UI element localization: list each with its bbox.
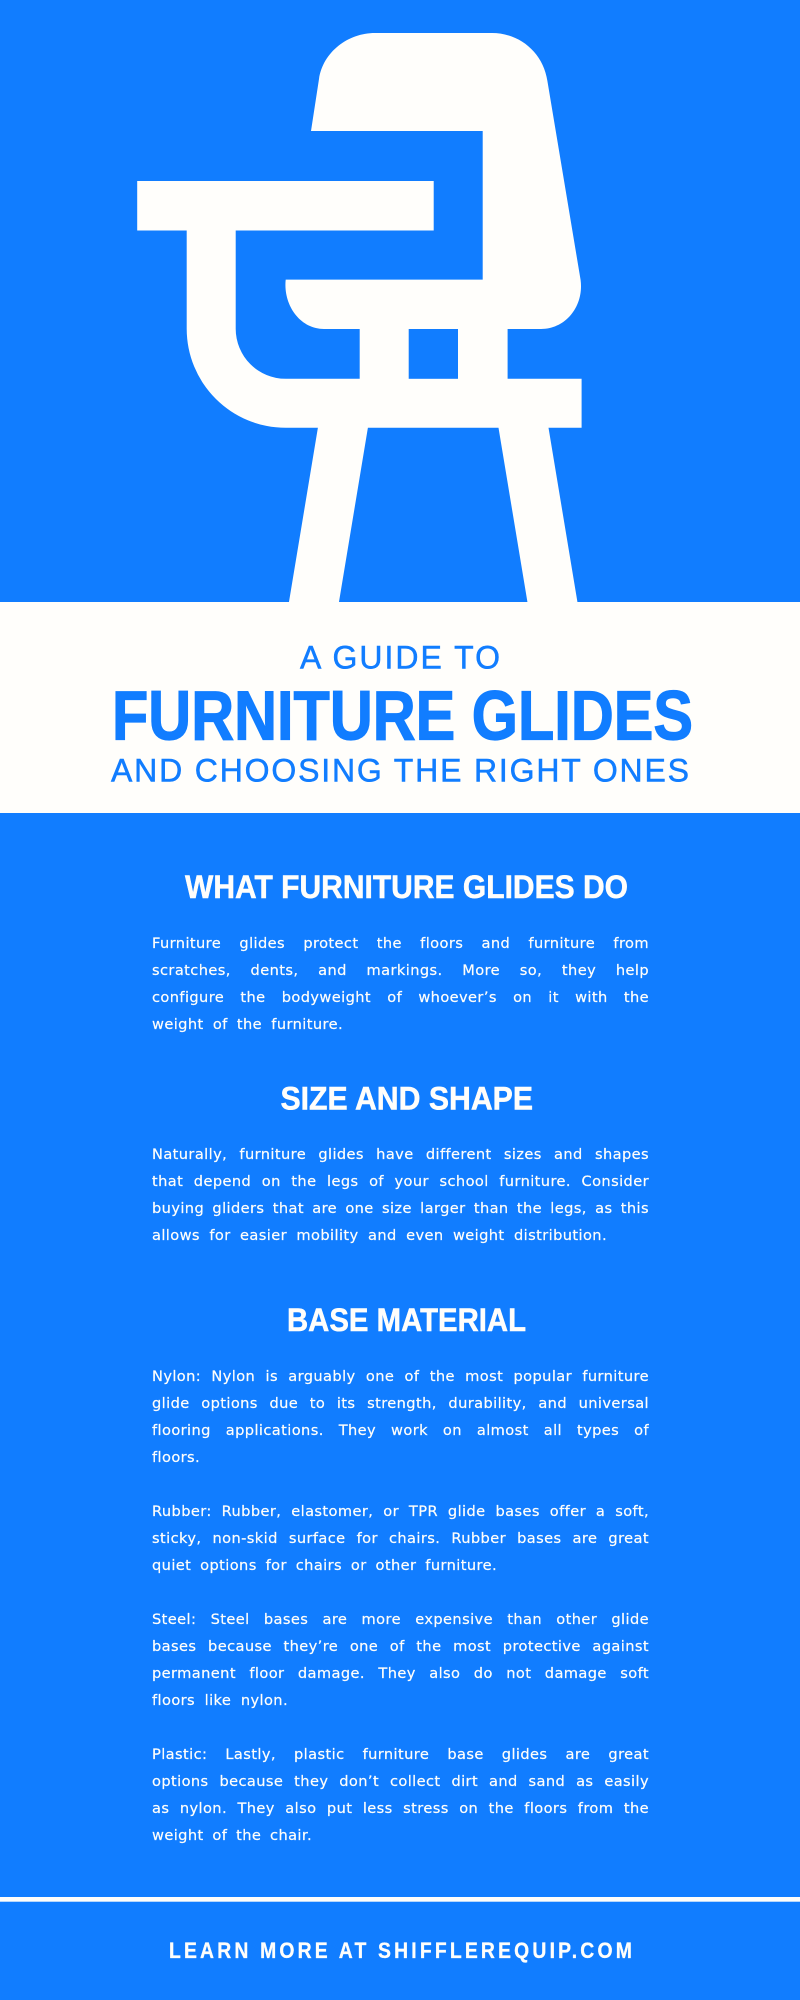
text block: nylon: glide options due to its strength, durability, and universal xyxy=(152,1394,649,1412)
text block: size and shape xyxy=(152,1146,649,1244)
text block: size and shape: buying gliders that are one size larger than the legs, as this xyxy=(152,1200,649,1216)
text block: what furniture glides do: Furniture glides protect the floors and furniture from xyxy=(152,934,649,952)
text block: what furniture glides do: weight of the furniture. xyxy=(152,1016,343,1032)
text block: nylon xyxy=(152,1368,649,1466)
title: AND CHOOSING THE RIGHT ONES xyxy=(111,752,689,788)
title: A GUIDE TO xyxy=(300,640,500,676)
text block: size and shape: Naturally, furniture glides have different sizes and shapes xyxy=(152,1146,649,1162)
text block: rubber: quiet options for chairs or other furniture. xyxy=(152,1556,497,1574)
text block: what furniture glides do: configure the bodyweight of whoever’s on it with the xyxy=(152,988,649,1006)
text block: nylon: flooring applications. They work on almost all types of xyxy=(152,1422,649,1438)
text block: plastic: options because they don’t collect dirt and sand as easily xyxy=(152,1772,649,1790)
text block: nylon: Nylon: Nylon is arguably one of the most popular furniture xyxy=(152,1368,649,1384)
footer call to action: LEARN MORE AT SHIFFLEREQUIP.COM xyxy=(169,1939,632,1963)
text block: what furniture glides do: scratches, dents, and markings. More so, they help xyxy=(152,962,649,978)
text block: rubber: sticky, non-skid surface for chairs. Rubber bases are great xyxy=(152,1530,649,1546)
text block: steel: Steel: Steel bases are more expensive than other glide xyxy=(152,1610,649,1628)
icon: school chair with desk arm xyxy=(137,33,582,603)
panel: title band xyxy=(0,602,800,813)
text block: plastic: as nylon. They also put less stress on the floors from the xyxy=(152,1800,649,1816)
text block: rubber xyxy=(152,1502,649,1574)
text block: what furniture glides do xyxy=(152,934,649,1032)
text block: size and shape: allows for easier mobility and even weight distribution. xyxy=(152,1226,607,1244)
text block: steel: permanent floor damage. They also do not damage soft xyxy=(152,1664,649,1682)
text block: plastic: weight of the chair. xyxy=(152,1826,312,1844)
text block: steel: floors like nylon. xyxy=(152,1692,288,1708)
footer divider line xyxy=(0,1897,800,1902)
title: FURNITURE GLIDES xyxy=(112,676,693,754)
text block: steel: bases because they’re one of the most protective against xyxy=(152,1638,649,1654)
heading: base material: BASE MATERIAL xyxy=(287,1302,526,1338)
text block: steel xyxy=(152,1610,649,1708)
text block: plastic: Plastic: Lastly, plastic furniture base glides are great xyxy=(152,1746,649,1762)
title xyxy=(111,640,693,788)
heading: what furniture glides do: WHAT FURNITURE GLIDES DO xyxy=(185,869,628,905)
text block: rubber: Rubber: Rubber, elastomer, or TPR glide bases offer a soft, xyxy=(152,1502,649,1520)
text block: nylon: floors. xyxy=(152,1448,200,1466)
text block: plastic xyxy=(152,1746,649,1844)
text block: size and shape: that depend on the legs of your school furniture. Consider xyxy=(152,1172,649,1190)
heading: size and shape: SIZE AND SHAPE xyxy=(280,1080,533,1116)
